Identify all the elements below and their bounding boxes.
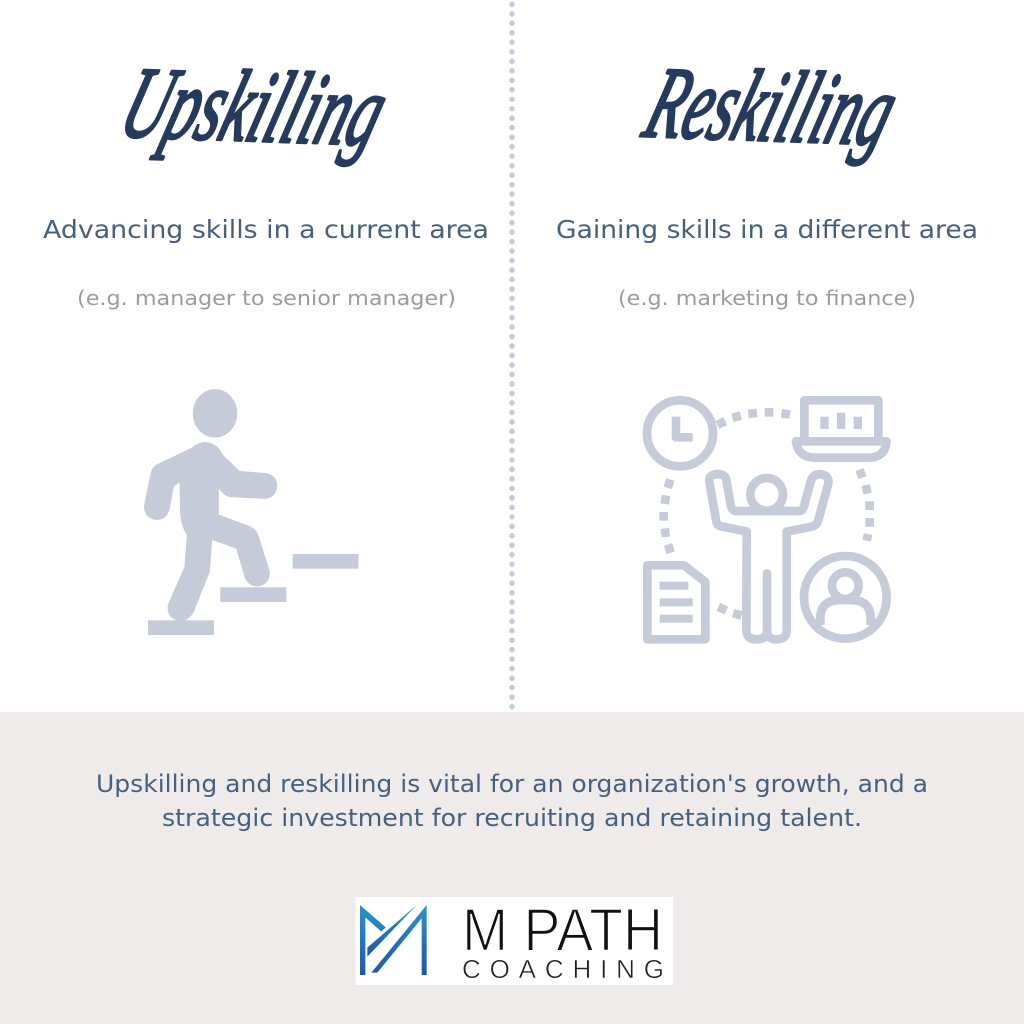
subheading: reskilling definition: Gaining skills in a different area [556,215,978,244]
summary text: strategic investment for recruiting and retaining talent. [162,804,862,832]
logo tagline: COACHING [462,954,664,984]
panel: upskilling [43,46,489,635]
logo wordmark: M PATH [462,896,663,964]
summary text: Upskilling and reskilling is vital for an organization's growth, and a [96,770,928,798]
panel: reskilling [556,46,978,639]
panel: bottom summary band [0,712,1024,1024]
example: upskilling: (e.g. manager to senior manager) [77,286,456,310]
example: reskilling: (e.g. marketing to finance) [618,286,916,310]
summary text [96,770,928,832]
subheading: upskilling definition: Advancing skills in a current area [43,215,489,244]
logo mark [360,904,427,975]
icon: person climbing stairs [145,390,358,635]
heading: Upskilling: Upskilling [109,46,401,167]
icon: person surrounded by skills [647,400,887,639]
logo: M Path Coaching [356,896,673,985]
